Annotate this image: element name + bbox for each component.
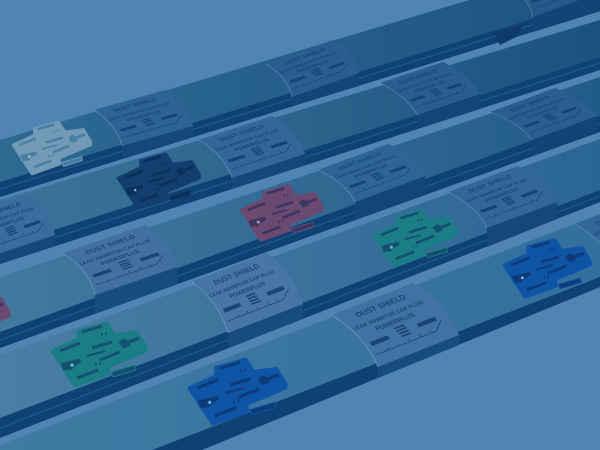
rail connector <box>494 25 522 45</box>
dark rail row 3 <box>0 116 600 348</box>
label tile 2 <box>266 38 363 106</box>
label tile 11: DUST SHIELD <box>467 174 514 194</box>
teal key left <box>52 323 146 386</box>
rail row 4 <box>0 139 600 438</box>
label tile 8: DUST SHIELD <box>337 152 384 172</box>
surface strip row 1 <box>0 0 600 182</box>
rail row 5 <box>0 195 600 450</box>
label tile 7: DUST SHIELD <box>84 233 138 256</box>
label tile 8: LEAK INHIBITOR CAP PLUG <box>333 154 398 180</box>
label tile 5: DUST SHIELD <box>397 69 440 86</box>
label tile 4: POWERPLUS <box>233 137 272 153</box>
surface strip row 4 <box>0 139 600 418</box>
label tile 10: POWERPLUS <box>228 281 268 300</box>
label tile 2: DUST SHIELD <box>283 47 327 66</box>
label tile 10 <box>192 251 308 348</box>
label tile 8: POWERPLUS <box>353 163 390 179</box>
label tile 10: LEAK INHIBITOR CAP PLUG <box>208 269 276 298</box>
blue key left <box>189 359 286 424</box>
rail row 2 <box>0 20 600 269</box>
label tile 1 <box>94 89 198 159</box>
label tile 1: LEAK INHIBITOR CAP PLUG <box>108 101 171 122</box>
maroon key fragment <box>0 290 9 348</box>
maroon key <box>241 186 323 240</box>
rail row 3 <box>0 77 600 348</box>
label tile 9 <box>490 86 600 156</box>
surface strip row 3 <box>0 77 600 332</box>
label tile 10: DUST SHIELD <box>212 263 262 287</box>
dark rail row 2 <box>0 57 600 264</box>
label tile 2: LEAK INHIBITOR CAP PLUG <box>279 51 339 74</box>
dark rail row 1 <box>0 0 600 197</box>
label tile 11 <box>448 164 562 247</box>
label tile 9: LEAK INHIBITOR CAP PLUG <box>507 97 567 120</box>
label tile 6 <box>0 191 60 269</box>
dark rail row 5 <box>152 277 600 450</box>
label tile 11: POWERPLUS <box>484 187 522 203</box>
label tile 7 <box>63 223 182 314</box>
label tile 2: POWERPLUS <box>295 59 330 74</box>
label tile 8 <box>318 142 430 220</box>
rail row 1 <box>0 0 600 197</box>
label tile 5 <box>380 61 484 129</box>
label tile 11: LEAK INHIBITOR CAP PLUG <box>464 177 528 203</box>
label tile 1: POWERPLUS <box>125 109 162 123</box>
blue key right <box>504 239 590 297</box>
dark rail row 4 <box>0 190 600 438</box>
label tile 5: POWERPLUS <box>413 80 446 93</box>
label tile 12: DUST SHIELD <box>354 293 408 319</box>
label tile 5: LEAK INHIBITOR CAP PLUG <box>396 72 453 93</box>
surface strip row 2 <box>0 20 600 247</box>
label tile 4: LEAK INHIBITOR CAP PLUG <box>214 128 280 152</box>
label tile 7: POWERPLUS <box>99 249 142 267</box>
surface strip row 5 <box>0 214 600 450</box>
label tile 1: DUST SHIELD <box>112 97 159 114</box>
navy key <box>118 154 200 208</box>
label tile 12: POWERPLUS <box>374 312 417 333</box>
teal key right <box>374 210 457 266</box>
label tile 9: DUST SHIELD <box>508 95 553 113</box>
label tile 7: LEAK INHIBITOR CAP PLUG <box>78 238 153 266</box>
label tile 4: DUST SHIELD <box>218 124 266 143</box>
label tile 12: LEAK INHIBITOR CAP PLUG <box>352 300 426 332</box>
label tile 13 <box>575 195 600 264</box>
label tile 9: POWERPLUS <box>525 105 560 119</box>
label tile 3 <box>507 0 600 32</box>
label tile 4 <box>199 114 310 189</box>
white key <box>13 122 91 174</box>
label tile 12 <box>332 281 464 378</box>
